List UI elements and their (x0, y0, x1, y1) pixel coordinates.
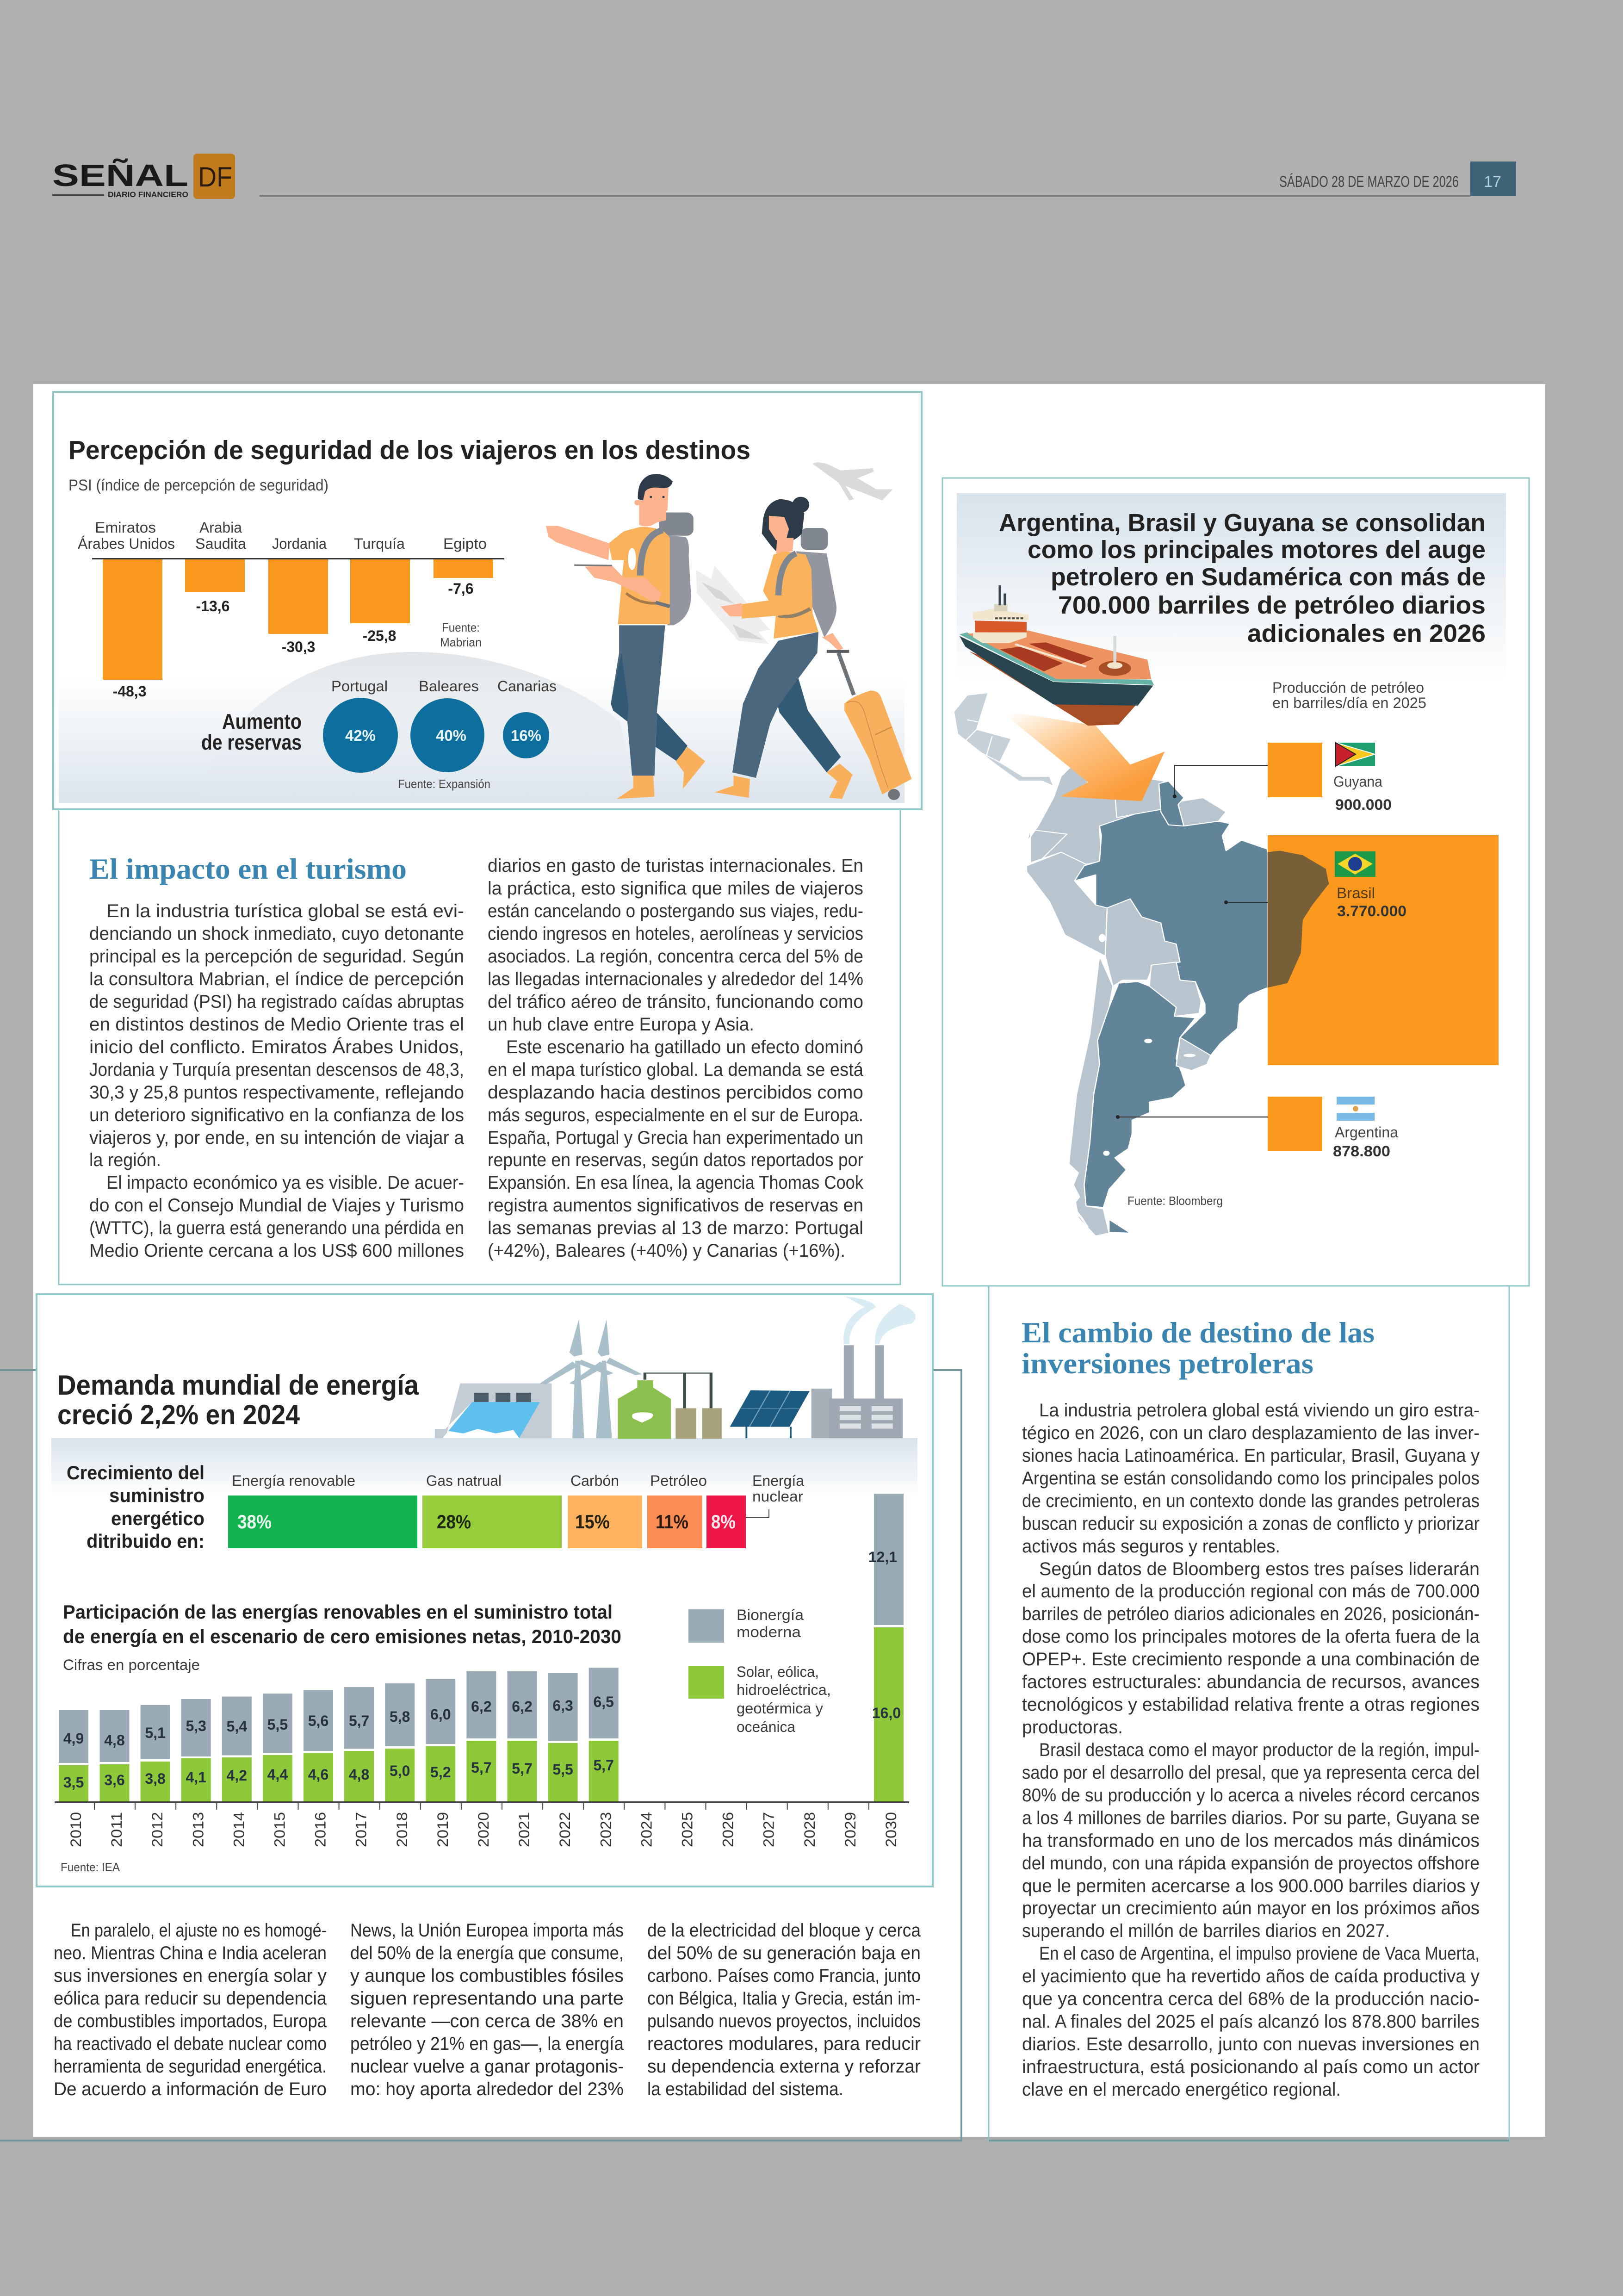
article text: que ya concentra cerca del 68% de la producción nacio- (1022, 1989, 1480, 2009)
text column 3: la estabilidad del sistema. (647, 2079, 843, 2099)
text column 2 (350, 1920, 624, 2099)
text column 2: ciendo ingresos en hoteles, aerolíneas y servicios (488, 924, 863, 944)
article frame (989, 1286, 1509, 2141)
article text: diarios. Este desarrollo, junto con nuevas inversiones en (1022, 2034, 1480, 2054)
growth by energy source: energético (111, 1508, 204, 1529)
white page sheet (33, 384, 1545, 2137)
stacked bar chart: renewables share: 2029 (842, 1812, 859, 1847)
bookings increase: Aumento (222, 709, 302, 733)
stacked bar chart: renewables share: 5,4 (227, 1718, 247, 1735)
growth by energy source: Energía (752, 1472, 804, 1489)
icon: wind turbines (540, 1319, 642, 1438)
text column 1 (89, 901, 465, 1261)
stacked bar chart: renewables share: 2027 (761, 1812, 777, 1847)
bar chart: PSI: -48,3 (113, 683, 146, 700)
growth by energy source: Petróleo (650, 1472, 707, 1489)
stacked bar chart: renewables share: 2015 (271, 1812, 288, 1847)
stacked bar chart: renewables share: 2028 (801, 1812, 818, 1847)
logo: Señal DF (52, 154, 235, 199)
text column 1 (54, 1920, 327, 2099)
text column 2: asociados. La región, concentra cerca del 5% de (488, 946, 863, 967)
newspaper header (52, 154, 1516, 199)
text column 1: de seguridad (PSI) ha registrado caídas abruptas (89, 992, 464, 1012)
text column 2: y aunque los combustibles fósiles (350, 1966, 624, 1986)
heading: El cambio de destino de las (1022, 1316, 1375, 1349)
stacked bar chart: renewables share: 6,2 (471, 1698, 492, 1715)
heading: como los principales motores del auge (1028, 536, 1486, 564)
stacked bar chart: renewables share: 2010 (68, 1812, 84, 1847)
bar chart: PSI: Arabia (199, 519, 242, 536)
text column 2: petróleo y 21% en gas—, la energía (350, 2034, 624, 2054)
text column 3: con Bélgica, Italia y Grecia, están im- (647, 1988, 921, 2009)
bookings increase: Canarias (497, 678, 557, 695)
illustration: man (546, 474, 705, 799)
stacked bar chart: renewables share: 2026 (720, 1812, 737, 1847)
text column 2: desplazando hacia destinos percibidos como (488, 1082, 863, 1103)
panel bottom gradient (59, 678, 904, 803)
stacked bar chart: renewables share: 6,3 (552, 1697, 573, 1714)
bookings increase: Portugal (331, 678, 388, 695)
text column 3: del 50% de su generación baja en (647, 1943, 921, 1963)
article text: Según datos de Bloomberg estos tres países liderarán (1039, 1559, 1480, 1579)
text column 3: pulsando nuevos proyectos, incluidos (647, 2011, 921, 2031)
heading: petrolero en Sudamérica con más de (1051, 563, 1486, 591)
text column 2: diarios en gasto de turistas internacionales. En (488, 856, 863, 876)
stacked bar chart: renewables share: 5,2 (430, 1764, 451, 1781)
text column 2 (488, 856, 864, 1261)
growth by energy source: Energía renovable (232, 1472, 355, 1489)
bar chart: PSI: Fuente: (442, 621, 480, 634)
article text: ha transformado en uno de los mercados más dinámicos (1022, 1831, 1480, 1851)
article text (1022, 1400, 1480, 2100)
Brazil data: 3.770.000 (1337, 903, 1406, 919)
heading: creció 2,2% en 2024 (57, 1399, 300, 1430)
heading: 700.000 barriles de petróleo diarios (1058, 591, 1486, 619)
text column 3: carbono. Países como Francia, junto (647, 1966, 921, 1986)
text column 2: un hub clave entre Europa y Asia. (488, 1014, 754, 1035)
bookings increase: de reservas (201, 730, 302, 754)
text column 1: la región. (89, 1150, 161, 1170)
growth by energy source: Carbón (570, 1472, 619, 1489)
stacked bar chart: renewables share: 2016 (312, 1812, 329, 1847)
text column 1: denciando un shock inmediato, cuyo detonante (89, 924, 464, 944)
stacked bar chart: renewables share: 4,6 (308, 1766, 328, 1783)
article text: Argentina se están consolidando como los principales polos (1022, 1468, 1480, 1489)
dome backdrop (194, 652, 638, 803)
text column 3: su dependencia externa y reforzar (647, 2056, 921, 2077)
bookings increase: Fuente: Expansión (398, 777, 490, 791)
bookings increase: 40% (436, 727, 466, 744)
text column 3 (647, 1920, 921, 2099)
chart heading: de energía en el escenario de cero emisiones netas, 2010-2030 (63, 1626, 621, 1647)
article text: nal. A finales del 2025 el país alcanzó los 878.800 barriles (1022, 2011, 1480, 2032)
bookings increase: 42% (345, 727, 376, 744)
text column 2: están cancelando o postergando sus viajes, redu- (488, 901, 863, 921)
logo: Señal DF: DF (198, 161, 232, 192)
text column 1: eólica para reducir su dependencia (54, 1988, 327, 2009)
text column 1: De acuerdo a información de Euro (54, 2079, 327, 2099)
page number (1470, 161, 1516, 196)
stacked bar chart: renewables share: 5,0 (390, 1762, 410, 1779)
text column 1: do con el Consejo Mundial de Viajes y Turismo (89, 1195, 464, 1216)
stacked bar chart: renewables share: 5,7 (512, 1760, 533, 1777)
stacked bar chart: renewables share: 3,5 (63, 1774, 84, 1791)
panel: world energy demand (37, 1294, 933, 1886)
stacked bar chart: renewables share: 2012 (149, 1812, 166, 1847)
stacked bar chart: renewables share: 3,8 (145, 1770, 166, 1787)
text column 2: Expansión. En esa línea, la agencia Thomas Cook (488, 1173, 864, 1193)
panel border (53, 392, 922, 809)
article text: En el caso de Argentina, el impulso proviene de Vaca Muerta, (1039, 1943, 1480, 1964)
text column 2: España, Portugal y Grecia han experimentado un (488, 1128, 863, 1148)
illustration: oil tanker (960, 585, 1154, 726)
text column 1: En la industria turística global se está evi- (106, 901, 464, 921)
growth by energy source: 28% (437, 1511, 471, 1533)
map: South America (954, 693, 1268, 1236)
bookings increase: Baleares (419, 678, 479, 695)
chart heading: Cifras en porcentaje (63, 1657, 200, 1673)
bar chart: PSI: Egipto (443, 535, 487, 552)
article text: tégico en 2026, con un claro desplazamiento de las inver- (1022, 1423, 1480, 1443)
text column 1: inicio del conflicto. Emiratos Árabes Unidos, (89, 1036, 464, 1057)
article text: clave en el mercado energético regional. (1022, 2079, 1341, 2100)
stacked bar chart: renewables share: 2025 (679, 1812, 696, 1847)
article text: La industria petrolera global está viviendo un giro estra- (1039, 1400, 1480, 1421)
article text: dose como los principales motores de la oferta fuera de la (1022, 1626, 1480, 1647)
icon: plane (812, 462, 893, 500)
illustration: suitcase (827, 652, 911, 800)
text column 1: (WTTC), la guerra está generando una pérdida en (89, 1218, 464, 1238)
Brazil data: Brasil (1337, 885, 1375, 901)
heading: inversiones petroleras (1022, 1347, 1313, 1380)
text column 1: un deterioro significativo en la confianza de los (89, 1105, 464, 1125)
text column 2: las semanas previas al 13 de marzo: Portugal (488, 1218, 863, 1238)
article frame (59, 809, 900, 1285)
article text: de crecimiento, en un contexto donde las grandes petroleras (1022, 1491, 1480, 1511)
header gradient (957, 493, 1506, 682)
text column 2: del 50% de la energía que consume, (350, 1943, 624, 1963)
heading: Percepción de seguridad de los viajeros en los destinos (68, 435, 750, 465)
Guyana data: Guyana (1333, 773, 1382, 790)
stacked bar chart: renewables share: 5,7 (349, 1713, 369, 1729)
Argentina data: Argentina (1335, 1124, 1398, 1141)
text column 1: En paralelo, el ajuste no es homogé- (71, 1920, 327, 1941)
text column 2: mo: hoy aporta alrededor del 23% (350, 2079, 624, 2099)
growth by energy source: Gas natrual (426, 1472, 502, 1489)
article text: el aumento de la producción regional con más de 700.000 (1022, 1581, 1480, 1601)
icon: flag of Brazil (1335, 851, 1375, 877)
growth by energy source: Crecimiento del (67, 1462, 204, 1483)
legend label: production: Producción de petróleo (1272, 679, 1424, 696)
text column 1: ha reactivado el debate nuclear como (54, 2034, 327, 2054)
article text: del mundo, con una rápida expansión de proyectos offshore (1022, 1853, 1480, 1874)
illustration: energy facilities (435, 1297, 916, 1439)
growth by energy source: 15% (575, 1511, 610, 1533)
text column 1: herramienta de seguridad energética. (54, 2056, 327, 2077)
growth by energy source: 38% (237, 1511, 272, 1533)
stacked bar chart: renewables share: 16,0 (872, 1705, 901, 1721)
article text: buscan reducir su exposición a zonas de conflicto y priorizar (1022, 1514, 1480, 1534)
text column 2: Este escenario ha gatillado un efecto dominó (506, 1037, 863, 1057)
source note: Fuente: Bloomberg (1127, 1194, 1223, 1208)
stacked bar chart: renewables share: 2024 (638, 1812, 655, 1847)
legend: oceánica (737, 1719, 795, 1735)
text column 1: Medio Oriente cercana a los US$ 600 millones (89, 1241, 464, 1261)
stacked bar chart: renewables share: 12,1 (868, 1549, 897, 1565)
text column 2: las llegadas internacionales y alrededor del 14% (488, 969, 863, 989)
text column 1: principal es la percepción de seguridad. Según (89, 946, 464, 967)
stacked bar chart: renewables share: 4,8 (349, 1766, 369, 1783)
icon: biofuel plant (618, 1373, 722, 1439)
article text: productoras. (1022, 1717, 1123, 1738)
stacked bar chart: renewables share: 5,8 (390, 1708, 410, 1725)
arrow from ship to map (1000, 710, 1165, 801)
band gradient (51, 1438, 917, 1496)
text column 3: de la electricidad del bloque y cerca (647, 1920, 921, 1941)
bookings increase: 16% (511, 727, 541, 744)
stacked bar chart: renewables share: 5,3 (186, 1718, 206, 1734)
icon: flag of Argentina (1337, 1097, 1375, 1121)
text column 1: Jordania y Turquía presentan descensos de 48,3, (89, 1060, 464, 1080)
text column 2: News, la Unión Europea importa más (350, 1920, 624, 1941)
panel: oil investments article (989, 1286, 1509, 2141)
source note: Fuente: IEA (61, 1860, 120, 1874)
bar chart: PSI: -30,3 (282, 639, 315, 655)
bookings increase (201, 678, 557, 791)
text column 2: (+42%), Baleares (+40%) y Canarias (+16%). (488, 1241, 845, 1261)
header rule (260, 195, 1470, 197)
bar chart: PSI: -13,6 (196, 598, 229, 614)
stacked bar chart: renewables share: 2021 (516, 1812, 533, 1847)
bar chart: PSI: Saudita (195, 535, 246, 552)
text column 1: sus inversiones en energía solar y (54, 1966, 327, 1986)
panel: traveller safety perception (53, 392, 922, 809)
legend label: production (1272, 679, 1426, 711)
heading: El impacto en el turismo (89, 852, 407, 885)
article text: sado por el desarrollo del presal, que ya representa cerca del (1022, 1762, 1480, 1783)
stacked bar chart: renewables share: 2013 (190, 1812, 206, 1847)
legend: hidroeléctrica, (737, 1682, 831, 1698)
text column 2: registra aumentos significativos de reservas en (488, 1195, 863, 1216)
stacked bar chart: renewables share: 5,5 (552, 1761, 573, 1778)
icon: flag of Guyana (1336, 743, 1375, 766)
stacked bar chart: renewables share: 5,7 (471, 1759, 492, 1776)
Guyana data (1173, 743, 1392, 813)
article text: 80% de su producción y lo acerca a niveles récord cercanos (1022, 1785, 1480, 1806)
stacked bar chart: renewables share: 3,6 (104, 1772, 125, 1788)
panel: tourism article (59, 809, 900, 1285)
heading: Demanda mundial de energía (57, 1370, 419, 1401)
stacked bar chart: renewables share: 2011 (108, 1812, 125, 1847)
text column 2: repunte en reservas, según datos reportados por (488, 1150, 863, 1170)
bar chart: PSI: Árabes Unidos (78, 535, 175, 552)
outer frame lines on the lower left article (0, 1370, 961, 2141)
article text: que le permiten acercarse a los 900.000 barriles diarios y (1022, 1876, 1480, 1896)
bar chart: PSI: -25,8 (363, 627, 396, 644)
stacked bar chart: renewables share: 2020 (475, 1812, 492, 1847)
Argentina data: 878.800 (1333, 1143, 1390, 1160)
stacked bar chart: renewables share: 5,5 (267, 1716, 288, 1733)
text column 2: relevante —con cerca de 38% en (350, 2011, 624, 2031)
chart heading: Participación de las energías renovables en el suministro total (63, 1601, 613, 1623)
Argentina data (1116, 1097, 1398, 1160)
stacked bar chart: renewables share: 5,7 (593, 1757, 614, 1774)
article text: tecnológicos y estabilidad relativa frente a otras regiones (1022, 1694, 1480, 1715)
heading (999, 509, 1486, 647)
heading (1022, 1316, 1375, 1380)
article text: siones hacia Latinoamérica. En particular, Brasil, Guyana y (1022, 1446, 1480, 1466)
stacked bar chart: renewables share: 4,9 (63, 1730, 84, 1747)
text column 2: en el mapa turístico global. La demanda se está (488, 1060, 864, 1080)
illustration: plane and travellers (546, 462, 911, 800)
text column 2: más seguros, especialmente en el sur de Europa. (488, 1105, 863, 1125)
text column 2: nuclear vuelve a ganar protagonis- (350, 2056, 624, 2077)
date: SÁBADO 28 DE MARZO DE 2026 (1279, 173, 1459, 191)
article frame bottom rule (989, 2140, 1509, 2141)
legend: Bionergía (737, 1607, 804, 1623)
article text: a los 4 millones de barriles diarios. Por su parte, Guyana se (1022, 1808, 1480, 1828)
stacked bar chart: renewables share: 6,0 (430, 1706, 451, 1723)
growth by energy source: 11% (656, 1511, 688, 1533)
legend (688, 1607, 831, 1735)
icon: solar panel (730, 1390, 810, 1438)
bar chart: PSI: Emiratos (95, 519, 156, 536)
article: energy text columns (54, 1920, 921, 2099)
growth by energy source: 8% (711, 1511, 736, 1533)
text column 1: 30,3 y 25,8 puntos respectivamente, reflejando (89, 1082, 464, 1103)
article text: factores estructurales: abundancia de recursos, avances (1022, 1672, 1480, 1692)
growth by energy source: nuclear (752, 1488, 803, 1505)
legend: moderna (737, 1624, 801, 1640)
heading: Argentina, Brasil y Guyana se consolidan (999, 509, 1486, 537)
panel: oil production map (942, 478, 1529, 1286)
logo: Señal DF: DIARIO FINANCIERO (108, 190, 188, 199)
bar chart: PSI (78, 519, 504, 700)
bar chart: PSI: -7,6 (448, 580, 474, 597)
heading: adicionales en 2026 (1247, 620, 1486, 647)
stacked bar chart: renewables share: 4,1 (186, 1769, 206, 1786)
stacked bar chart: renewables share: 2030 (883, 1812, 899, 1847)
stacked bar chart: renewables share: 5,1 (145, 1725, 166, 1741)
panel border (37, 1294, 933, 1886)
article text: OPEP+. Este crecimiento responde a una combinación de (1022, 1649, 1480, 1669)
stacked bar chart: renewables share: 6,2 (512, 1698, 533, 1715)
text column 3: reactores modulares, para reducir (647, 2034, 921, 2054)
growth by energy source: suministro (109, 1484, 204, 1506)
article text: Brasil destaca como el mayor productor de la región, impul- (1039, 1740, 1480, 1760)
article text: infraestructura, está posicionando al país como un actor (1022, 2057, 1480, 2077)
legend: geotérmica y (737, 1700, 823, 1717)
stacked bar chart: renewables share: 4,4 (267, 1766, 288, 1783)
stacked bar chart: renewables share: 2022 (557, 1812, 573, 1847)
panel border (942, 478, 1529, 1286)
bar chart: PSI: Turquía (354, 535, 405, 552)
stacked bar chart: renewables share: 5,6 (308, 1713, 328, 1729)
text column 1: en distintos destinos de Medio Oriente tras el (89, 1014, 464, 1035)
article text: el yacimiento que ha revertido años de caída productiva y (1022, 1966, 1480, 1986)
subtitle: PSI (índice de percepción de seguridad) (68, 477, 328, 494)
heading (57, 1370, 419, 1430)
legend label: production: en barriles/día en 2025 (1272, 695, 1426, 711)
text column 1: de combustibles importados, Europa (54, 2011, 327, 2031)
Guyana data: 900.000 (1335, 796, 1392, 813)
icon: dam (435, 1384, 551, 1438)
text column 1: la consultora Mabrian, el índice de percepción (89, 969, 464, 989)
stacked bar chart: renewables share (55, 1494, 909, 1847)
article text: proyectar un crecimiento aún mayor en los próximos años (1022, 1898, 1480, 1918)
text column 1: El impacto económico ya es visible. De acuer- (106, 1173, 464, 1193)
stacked bar chart: renewables share: 4,2 (227, 1767, 247, 1784)
stacked bar chart: renewables share: 2014 (230, 1812, 247, 1847)
legend: Solar, eólica, (737, 1663, 819, 1680)
Brazil data (1224, 835, 1499, 1065)
text column 2: siguen representando una parte (350, 1988, 624, 2009)
page number: 17 (1484, 173, 1501, 191)
growth by energy source (67, 1462, 804, 1552)
text column 1: viajeros y, por ende, en su intención de viajar a (89, 1128, 465, 1148)
article text: activos más seguros y rentables. (1022, 1536, 1280, 1557)
stacked bar chart: renewables share: 2023 (597, 1812, 614, 1847)
illustration: woman (696, 497, 853, 799)
stacked bar chart: renewables share: 2017 (353, 1812, 370, 1847)
article text: superando el millón de barriles diarios en 2027. (1022, 1921, 1390, 1941)
logo: Señal DF: SEÑAL (52, 158, 188, 193)
text column 1: neo. Mientras China e India aceleran (54, 1943, 327, 1963)
bar chart: PSI: Jordania (272, 535, 327, 552)
text column 2: la práctica, esto significa que miles de viajeros (488, 878, 863, 899)
chart heading (63, 1601, 621, 1673)
icon: factory (812, 1297, 916, 1438)
text column 2: del tráfico aéreo de tránsito, funcionando como (488, 992, 863, 1012)
stacked bar chart: renewables share: 6,5 (593, 1694, 614, 1710)
stacked bar chart: renewables share: 2019 (434, 1812, 451, 1847)
article text: barriles de petróleo diarios adicionales en 2026, posicionán- (1022, 1604, 1480, 1624)
stacked bar chart: renewables share: 4,8 (104, 1732, 125, 1749)
stacked bar chart: renewables share: 2018 (394, 1812, 410, 1847)
growth by energy source: ditribuido en: (87, 1530, 204, 1552)
bar chart: PSI: Mabrian (440, 635, 482, 649)
